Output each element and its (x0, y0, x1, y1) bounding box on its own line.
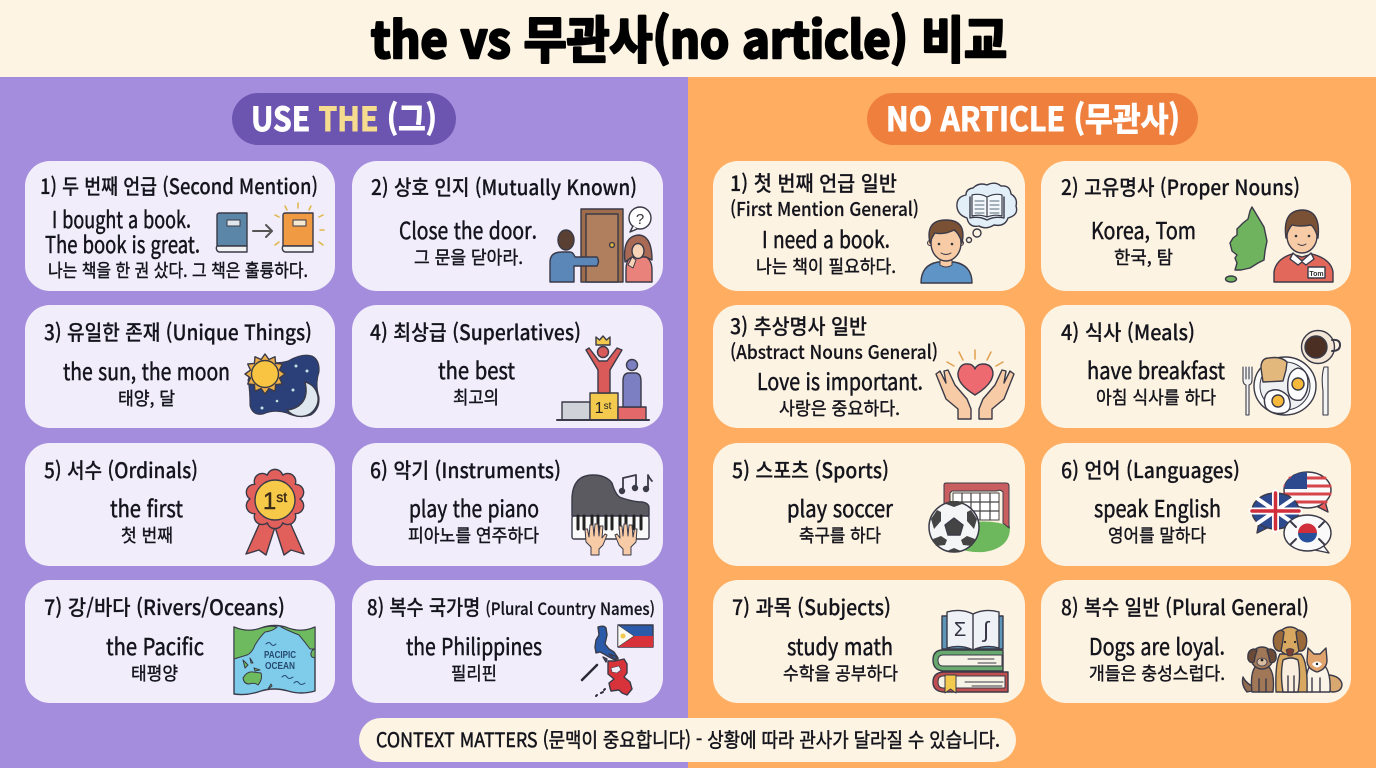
header band (0, 0, 1376, 77)
card: instruments: 피아노를 연주하다 (408, 522, 539, 548)
card: abstract nouns general (713, 305, 1025, 428)
icon: first place rosette (246, 469, 304, 555)
icon: winners podium: 1 (595, 400, 604, 417)
card: first mention general: I need a book. (762, 221, 890, 255)
card: unique things: 태양, 달 (118, 385, 175, 411)
icon: philippines map and flag (582, 625, 653, 696)
card: languages: 6) 언어 (Languages) (1061, 455, 1240, 485)
card: superlatives: 최고의 (453, 384, 499, 410)
icon: pacific ocean map: PACIPIC (264, 649, 296, 661)
card: plural country names: 8) 복수 국가명 (Plural Country Names) (367, 592, 655, 622)
icon: person thinking of a book (921, 183, 1017, 283)
card: meals (1041, 305, 1351, 428)
icon: sun and moon (245, 354, 319, 417)
card: plural general: 개들은 충성스럽다. (1089, 660, 1225, 686)
card: languages: speak English (1094, 490, 1221, 524)
card: abstract nouns general: 3) 추상명사 일반 (730, 311, 867, 341)
card: proper nouns (1041, 161, 1351, 291)
card: proper nouns: 2) 고유명사 (Proper Nouns) (1061, 172, 1300, 202)
card: proper nouns: Korea, Tom (1091, 212, 1196, 246)
icon: pacific ocean map: OCEAN (265, 660, 295, 672)
card: abstract nouns general: 사랑은 중요하다. (779, 395, 900, 421)
icon: books with arrow (216, 203, 324, 252)
icon: winners podium (557, 336, 649, 420)
card: plural general (1041, 580, 1351, 703)
icon: three dogs (1242, 627, 1342, 692)
card: instruments: 6) 악기 (Instruments) (370, 455, 561, 485)
card: languages: 영어를 말하다 (1108, 522, 1206, 548)
card: rivers and oceans: 태평양 (131, 660, 178, 686)
card: meals: 아침 식사를 하다 (1096, 384, 1216, 410)
icon: grand piano with hands (572, 475, 652, 555)
card: second mention: 1) 두 번째 언급 (Second Mention) (40, 171, 318, 201)
card: mutually known (352, 161, 663, 291)
card: mutually known: 2) 상호 인지 (Mutually Known) (371, 172, 637, 202)
card: rivers and oceans (25, 580, 335, 703)
icon: korea map and tom: Tom (1309, 271, 1324, 278)
icon: flag speech bubbles (1252, 472, 1331, 553)
heading pill: no article: NO ARTICLE (무관사) (886, 93, 1180, 141)
card: languages (1041, 443, 1351, 566)
icon: soccer ball and goal (929, 483, 1010, 552)
card: rivers and oceans: the Pacific (106, 628, 204, 662)
card: plural general: 8) 복수 일반 (Plural General) (1061, 592, 1309, 622)
icon: hands holding heart (936, 350, 1014, 419)
icon: first place rosette: st (276, 489, 287, 505)
card: second mention: 나는 책을 한 권 샀다. 그 책은 훌륭하다. (48, 257, 308, 283)
card: proper nouns: 한국, 탐 (1114, 244, 1173, 270)
card: ordinals: 첫 번째 (121, 522, 173, 548)
card: first mention general: (First Mention General) (730, 195, 919, 222)
card: rivers and oceans: 7) 강/바다 (Rivers/Oceans) (44, 592, 285, 622)
icon: door and two people (550, 207, 652, 282)
card: sports: play soccer (787, 490, 893, 524)
callout: context matters: CONTEXT MATTERS (문맥이 중요합니다) - 상황에 따라 관사가 달라질 수 있습니다. (376, 724, 1000, 753)
card: sports (713, 443, 1025, 566)
card: plural country names: the Philippines (406, 628, 542, 662)
icon: stacked math books: ∫ (981, 617, 991, 642)
card: second mention (25, 161, 335, 291)
title: the vs 무관사(no article) 비교 (371, 1, 1007, 73)
card: unique things: 3) 유일한 존재 (Unique Things) (44, 317, 312, 347)
card: instruments: play the piano (409, 490, 539, 524)
icon: korea map and tom (1226, 207, 1333, 282)
card: unique things (25, 305, 335, 428)
card: ordinals: the first (110, 490, 183, 524)
callout: context matters (359, 718, 1016, 762)
card: plural country names (352, 580, 663, 703)
card: subjects: 7) 과목 (Subjects) (732, 592, 891, 622)
icon: winners podium: st (604, 401, 612, 412)
card: sports: 5) 스포츠 (Sports) (732, 455, 889, 485)
card: subjects: 수학을 공부하다 (783, 660, 898, 686)
card: abstract nouns general: (Abstract Nouns General) (730, 338, 938, 365)
card: subjects (713, 580, 1025, 703)
card: plural country names: 필리핀 (451, 660, 497, 686)
card: second mention: I bought a book. (52, 201, 191, 235)
panel: use the (0, 77, 688, 768)
card: unique things: the sun, the moon (63, 353, 230, 387)
card: first mention general (713, 161, 1025, 291)
card: instruments (352, 443, 663, 566)
card: meals: have breakfast (1087, 352, 1225, 386)
card: ordinals: 5) 서수 (Ordinals) (44, 455, 198, 485)
icon: breakfast plate and coffee (1243, 330, 1340, 415)
card: first mention general: 나는 책이 필요하다. (756, 253, 896, 279)
heading pill: use the: USE THE (그) (251, 93, 437, 141)
card: superlatives (352, 305, 663, 428)
card: mutually known: Close the door. (399, 212, 537, 246)
icon: door and two people: ? (636, 211, 644, 228)
panel: no article (688, 77, 1376, 768)
card: first mention general: 1) 첫 번째 언급 일반 (730, 168, 897, 198)
card: abstract nouns general: Love is important. (757, 363, 923, 397)
card: subjects: study math (787, 628, 893, 662)
card: meals: 4) 식사 (Meals) (1061, 317, 1195, 347)
icon: stacked math books: Σ (954, 619, 966, 641)
card: sports: 축구를 하다 (799, 522, 881, 548)
card: ordinals (25, 443, 335, 566)
card: plural general: Dogs are loyal. (1089, 628, 1225, 662)
icon: first place rosette: 1 (263, 488, 276, 515)
card: mutually known: 그 문을 닫아라. (414, 244, 523, 270)
card: superlatives: the best (438, 352, 515, 386)
card: second mention: The book is great. (45, 226, 200, 260)
icon: stacked math books (933, 610, 1008, 693)
card: superlatives: 4) 최상급 (Superlatives) (370, 317, 581, 347)
icon: pacific ocean map (234, 626, 315, 695)
